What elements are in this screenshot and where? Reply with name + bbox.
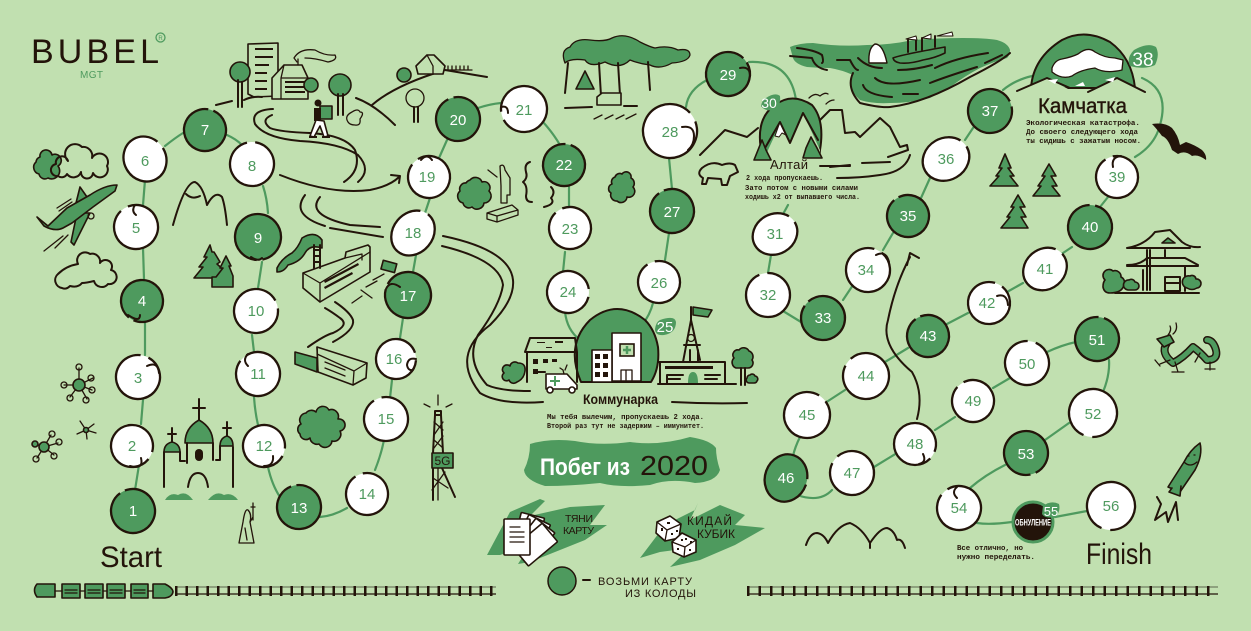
courier <box>309 100 332 138</box>
bush by statue <box>458 177 491 209</box>
node 33: 33 <box>815 310 831 327</box>
node 37: 37 <box>982 103 998 120</box>
node 40 <box>1063 200 1117 254</box>
Altai scene: Зато потом с новыми силами <box>745 185 858 193</box>
priest <box>239 503 255 543</box>
fir trees <box>194 245 233 287</box>
node 19: 19 <box>419 169 435 186</box>
Kommunarka text: Второй раз тут не задержим – иммунитет. <box>547 422 704 431</box>
node 2: 2 <box>128 438 136 455</box>
node 54 <box>929 478 989 538</box>
node 13: 13 <box>291 500 307 517</box>
node 24: 24 <box>560 284 576 301</box>
dice action <box>640 503 765 567</box>
node 11 <box>228 344 288 404</box>
node 37 <box>965 86 1015 136</box>
node 52 <box>1061 381 1125 445</box>
node 14: 14 <box>359 486 375 503</box>
node 13 <box>275 483 323 531</box>
node 52: 52 <box>1085 406 1101 423</box>
restart note: Все отлично, но <box>957 545 1023 553</box>
node 15 <box>361 394 411 444</box>
cloud left <box>55 252 117 289</box>
node 10 <box>232 287 280 335</box>
statue <box>487 162 554 222</box>
dice action: КУБИК <box>697 527 735 541</box>
node 55 reset <box>1013 502 1060 542</box>
card action: КАРТУ <box>563 525 594 537</box>
node 24 <box>542 266 594 318</box>
node 32: 32 <box>760 287 776 304</box>
node 28: 28 <box>662 124 678 141</box>
factory smoke <box>277 234 322 272</box>
card action: ТЯНИ <box>565 513 593 525</box>
node 45 <box>775 383 839 447</box>
title banner <box>524 437 720 486</box>
bush <box>298 406 345 447</box>
Kommunarka text <box>547 413 704 431</box>
node 46 <box>758 448 814 508</box>
node 27 <box>644 183 700 239</box>
logo: MGT <box>80 70 103 81</box>
node 39: 39 <box>1109 169 1125 186</box>
railway right <box>747 587 1218 594</box>
node 23: 23 <box>562 221 578 238</box>
node 41 <box>1015 239 1075 299</box>
game path connectors <box>135 62 1163 524</box>
node 43: 43 <box>920 328 936 345</box>
node 41: 41 <box>1037 261 1053 278</box>
legend: take a card: ВОЗЬМИ КАРТУ <box>598 576 693 588</box>
node 8 <box>227 139 277 189</box>
airplane <box>37 185 117 251</box>
node 34: 34 <box>858 262 874 279</box>
node 18 <box>382 202 444 264</box>
node 47: 47 <box>844 465 860 482</box>
pagoda <box>1103 230 1201 293</box>
node 49: 49 <box>965 393 981 410</box>
node 42: 42 <box>979 295 995 312</box>
node 17: 17 <box>400 288 416 305</box>
node 4: 4 <box>138 293 146 310</box>
node 50: 50 <box>1019 356 1035 373</box>
lake with ship <box>790 32 1010 107</box>
node 55 reset: 55 <box>1044 504 1058 519</box>
Altai scene: Алтай <box>770 157 808 172</box>
node 50 <box>998 334 1056 392</box>
church <box>164 399 238 500</box>
5G tower: 5G <box>434 454 451 468</box>
Kommunarka title: Коммунарка <box>583 391 658 407</box>
node 35: 35 <box>900 208 916 225</box>
node 21 <box>499 84 549 134</box>
node 1 <box>105 483 161 539</box>
node 5: 5 <box>132 220 140 237</box>
small hills bottom <box>806 523 905 548</box>
legend: take a card: ИЗ КОЛОДЫ <box>625 588 696 600</box>
logo: BUBEL <box>31 33 159 71</box>
title banner: Побег из <box>540 454 630 481</box>
node 48 <box>885 414 945 474</box>
node 46: 46 <box>778 470 794 487</box>
node 35 <box>880 188 936 244</box>
node 3 <box>108 347 168 407</box>
node 16: 16 <box>386 351 402 368</box>
start label: Start <box>100 541 163 574</box>
node 51: 51 <box>1089 332 1105 349</box>
node 53 <box>1001 428 1051 478</box>
bush and cloud top left <box>34 144 108 179</box>
node 20 <box>433 94 483 144</box>
Kommunarka hospital scene <box>502 307 758 393</box>
factory <box>303 245 397 303</box>
node 22 <box>537 138 591 192</box>
node 6: 6 <box>141 153 149 170</box>
node 8: 8 <box>248 158 256 175</box>
Kamchatka scene: 38 <box>1132 50 1154 71</box>
Kamchatka scene: До своего следующего хода <box>1026 129 1138 137</box>
dice action: КИДАЙ <box>687 513 732 528</box>
bush center <box>609 172 635 203</box>
node 11: 11 <box>250 366 266 383</box>
node 29: 29 <box>720 67 736 84</box>
Kamchatka scene: Камчатка <box>1038 95 1127 118</box>
node 39 <box>1093 153 1141 201</box>
node 2 <box>102 416 162 476</box>
node 14 <box>343 470 391 518</box>
node 6 <box>115 129 175 189</box>
railway left <box>175 587 496 594</box>
node 12: 12 <box>256 438 272 455</box>
node 12 <box>235 417 293 475</box>
Altai scene: ходишь х2 от выпавшего числа. <box>745 194 860 202</box>
node 56 <box>1079 474 1143 538</box>
warehouse and road <box>295 302 367 385</box>
node 56: 56 <box>1103 498 1119 515</box>
node 26: 26 <box>651 275 667 292</box>
dragon <box>1155 323 1216 372</box>
node 17 <box>377 264 439 326</box>
Altai scene: 2 хода пропускаешь. <box>746 175 823 183</box>
virus icons <box>32 364 96 462</box>
node 18: 18 <box>405 225 421 242</box>
node 9: 9 <box>254 230 262 247</box>
node 42 <box>959 273 1019 333</box>
node 43 <box>901 309 955 363</box>
node 53: 53 <box>1018 446 1034 463</box>
node 49 <box>945 373 1001 429</box>
node 33 <box>792 287 854 349</box>
restart note: нужно переделать. <box>957 554 1035 562</box>
fir trees center right <box>990 154 1060 228</box>
node 55 reset: ОБНУЛЕНИЕ <box>1015 518 1051 528</box>
node 21: 21 <box>516 102 532 119</box>
node 9 <box>233 212 283 262</box>
node 23 <box>543 201 597 255</box>
node 31 <box>745 205 805 263</box>
node 19 <box>400 148 458 206</box>
node 36: 36 <box>938 151 954 168</box>
node 54: 54 <box>951 500 967 517</box>
node 40: 40 <box>1082 219 1098 236</box>
node 22: 22 <box>556 157 572 174</box>
Kamchatka scene: ты сидишь с зажатым носом. <box>1026 138 1141 146</box>
town on the hill <box>216 43 487 125</box>
node 45: 45 <box>799 407 815 424</box>
title banner: 2020 <box>640 450 708 481</box>
finish label: Finish <box>1086 538 1152 571</box>
node 20: 20 <box>450 112 466 129</box>
node 16 <box>374 337 418 381</box>
mountain <box>173 182 227 225</box>
node 15: 15 <box>378 411 394 428</box>
node 31: 31 <box>767 226 783 243</box>
nuclear plant <box>563 36 690 119</box>
node 7: 7 <box>201 122 209 139</box>
rocket <box>1155 443 1201 522</box>
bat <box>1152 124 1206 160</box>
card action <box>487 499 607 566</box>
node 48: 48 <box>907 436 923 453</box>
node 34 <box>837 239 899 301</box>
node 36 <box>915 129 977 189</box>
node 29 <box>698 44 758 104</box>
node 44: 44 <box>858 368 874 385</box>
node 10: 10 <box>248 303 264 320</box>
train <box>34 584 173 598</box>
node 5 <box>108 199 164 255</box>
node 3: 3 <box>134 370 142 387</box>
legend: take a card <box>548 567 696 600</box>
node 7 <box>177 102 233 158</box>
node 28 <box>635 96 705 166</box>
node 32 <box>746 273 790 317</box>
Kamchatka scene <box>1017 34 1158 146</box>
logo: R <box>158 36 163 42</box>
roads and arrows <box>254 109 920 419</box>
node 27: 27 <box>664 204 680 221</box>
node 1: 1 <box>129 503 137 520</box>
restart note <box>957 545 1035 562</box>
bear <box>699 163 738 185</box>
5G tower <box>424 395 455 500</box>
Kommunarka text: Мы тебя вылечим, пропускаешь 2 хода. <box>547 413 704 422</box>
Altai scene: 30 <box>761 95 777 111</box>
Kamchatka scene: Экологическая катастрофа. <box>1026 120 1140 128</box>
node 47 <box>821 442 883 504</box>
node 26 <box>635 258 683 306</box>
node 51 <box>1069 311 1125 367</box>
Kommunarka hospital scene: 25 <box>657 319 673 336</box>
Altai scene <box>700 93 910 202</box>
node 44 <box>834 344 898 408</box>
house on the far hill <box>397 55 472 122</box>
node 4 <box>112 271 172 331</box>
